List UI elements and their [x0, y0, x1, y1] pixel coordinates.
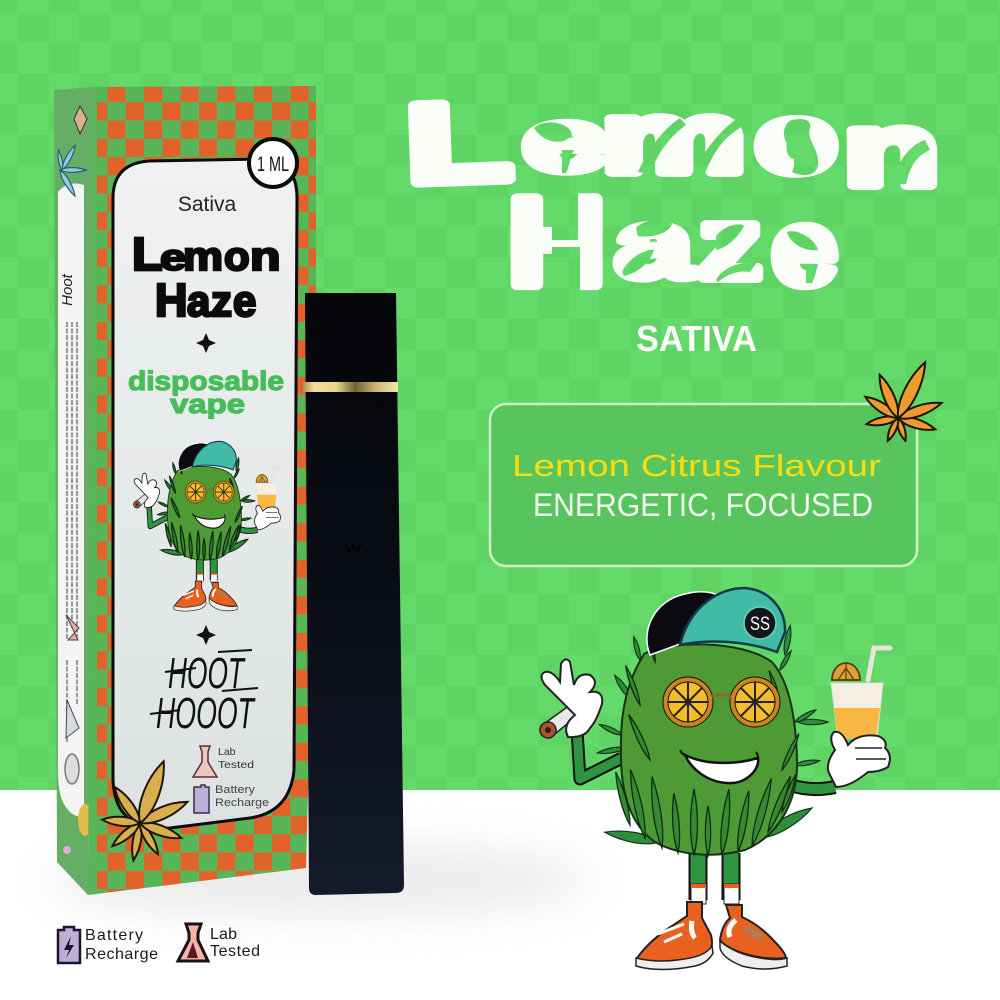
- checkered green background: [0, 0, 1000, 792]
- product box: [54, 86, 316, 895]
- label: disposable vape: vape: [170, 389, 245, 419]
- label: sparkle: [196, 333, 216, 353]
- label: disposable vape: disposable: [128, 366, 284, 396]
- label: Battery Recharge: [215, 784, 269, 809]
- label: Lemon Haze: z: [211, 277, 232, 326]
- Hoot Hooot logo: HOOT: [168, 649, 246, 698]
- title letters: L: [404, 78, 513, 206]
- title letters: [404, 78, 939, 311]
- flavour panel: [490, 404, 917, 566]
- gold cannabis leaf: [102, 759, 190, 861]
- label: Lemon Haze: o: [224, 234, 250, 279]
- device logo: [345, 543, 361, 552]
- label: Battery Recharge: Battery: [215, 784, 256, 796]
- title letters: e: [522, 91, 609, 189]
- label: disposable vape: [128, 366, 284, 419]
- title letters: z: [699, 188, 761, 299]
- white floor: [0, 790, 1000, 1000]
- label: Lemon Haze: m: [183, 234, 223, 279]
- floor shadow: [50, 844, 590, 916]
- effects text: ENERGETIC, FOCUSED: [533, 487, 873, 523]
- legend: battery icon: [58, 927, 80, 963]
- Hoot Hooot logo: HOOOT: [156, 689, 256, 738]
- title letters: m: [602, 81, 746, 194]
- cap badge: [744, 607, 776, 639]
- subtitle: SATIVA: SATIVA: [636, 318, 757, 359]
- label: Battery Recharge: Recharge: [215, 797, 269, 809]
- legend: Lab Tested: [210, 926, 260, 960]
- Hoot Hooot logo: [150, 649, 258, 738]
- legend: Battery Recharge: [85, 927, 158, 963]
- legend: Battery Recharge: Recharge: [85, 946, 158, 963]
- orange cannabis leaf: [863, 359, 943, 442]
- label icon: battery: [194, 785, 209, 813]
- white label panel: [113, 159, 297, 828]
- box front checker: [88, 86, 316, 895]
- label: Sativa: Sativa: [178, 193, 236, 216]
- label: Lemon Haze: e: [233, 277, 256, 326]
- legend: Lab Tested: Tested: [210, 943, 260, 960]
- title: Lemon Haze: [404, 78, 939, 311]
- label: Lemon Haze: n: [250, 234, 281, 279]
- mascot character: [540, 588, 890, 970]
- label: Lab Tested: [218, 746, 254, 771]
- label: Lemon Haze: L: [132, 230, 163, 281]
- legend: Battery Recharge: Battery: [85, 927, 143, 944]
- label: Lemon Haze: e: [160, 237, 186, 278]
- gold band: [303, 382, 398, 392]
- vape device: [303, 293, 404, 895]
- legend: flask icon: [178, 924, 208, 961]
- title letters: e: [772, 188, 837, 307]
- label icon: flask: [193, 746, 217, 777]
- title letters: H: [508, 174, 605, 311]
- 1 ML badge: 1 ML: [257, 153, 289, 176]
- 1 ML badge: [249, 139, 297, 187]
- title letters: n: [844, 92, 939, 208]
- label: sparkle 2: [196, 625, 216, 645]
- box green margins: [88, 87, 97, 895]
- legend: Lab Tested: Lab: [210, 926, 237, 943]
- label: Lab Tested: Tested: [218, 759, 254, 771]
- title letters: o: [755, 85, 837, 193]
- box spine: Hoot: [59, 273, 76, 306]
- small mascot: [133, 441, 280, 611]
- flavour text: Lemon Citrus Flavour: [512, 448, 881, 483]
- title letter counters: [534, 118, 930, 293]
- label: Lab Tested: Lab: [218, 746, 236, 758]
- cap badge: SS: [750, 614, 770, 635]
- label: Lemon Haze: H: [155, 275, 187, 326]
- label: Lemon Haze: [132, 230, 281, 326]
- title letters: a: [615, 191, 695, 298]
- box spine: [54, 87, 93, 895]
- label: Lemon Haze: a: [187, 277, 211, 326]
